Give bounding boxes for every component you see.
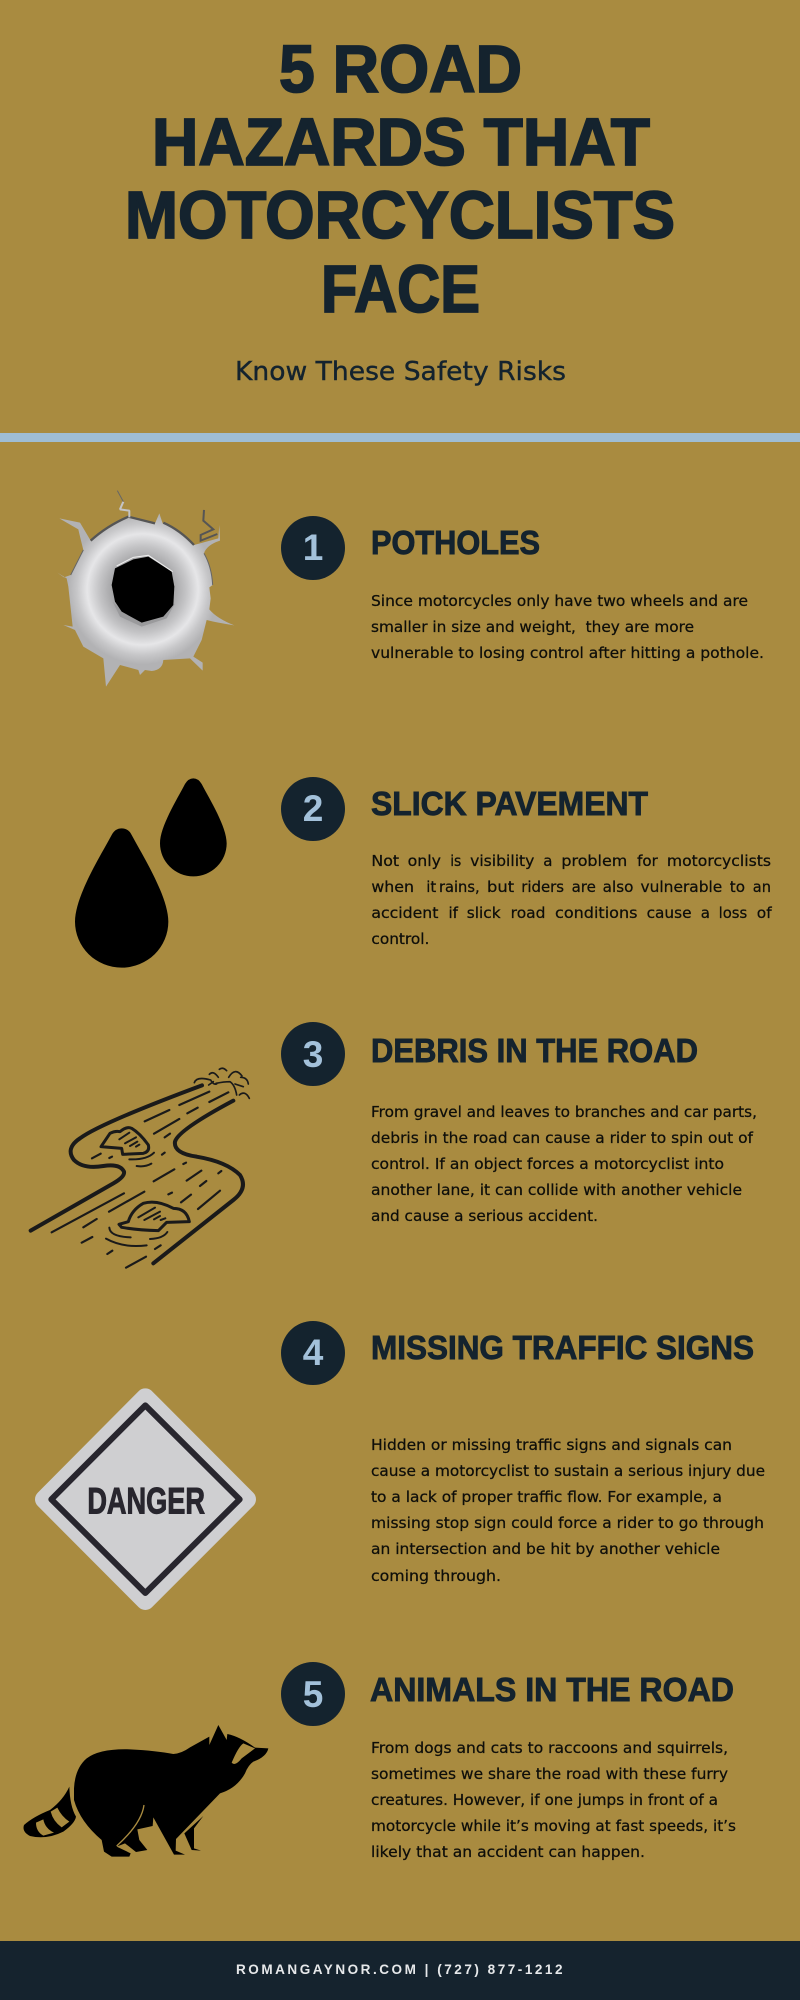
text block: slick pavement: to [730, 878, 745, 896]
title: FACE [321, 252, 480, 327]
text block: slick pavement: problem [561, 852, 627, 870]
text block: debris: and cause a serious accident. [371, 1207, 598, 1225]
panel: potholes [57, 491, 764, 687]
text block: animals: From dogs and cats to raccoons and squirrels, [371, 1739, 728, 1757]
text block: slick pavement: vulnerable [640, 878, 722, 896]
text block: missing signs: to a lack of proper traffic flow. For example, a [371, 1488, 722, 1506]
text block: slick pavement: for [637, 852, 659, 870]
text block: animals: creatures. However, if one jumps in front of a [371, 1791, 718, 1809]
text block: slick pavement: conditions [555, 904, 638, 922]
number badge 1 [281, 516, 345, 580]
number badge 2 [281, 777, 345, 841]
subtitle: Know These Safety Risks [235, 357, 566, 387]
icon: water drops [75, 778, 227, 968]
text block: potholes [371, 592, 764, 662]
text block: debris: debris in the road can cause a rider to spin out of [371, 1129, 754, 1147]
text block: slick pavement: a [543, 852, 552, 870]
text block: slick pavement: is [450, 852, 461, 870]
text block: slick pavement: Not [371, 852, 399, 870]
footer: ROMANGAYNOR.COM | (727) 877-1212 [236, 1961, 565, 1977]
text block: slick pavement: road [511, 904, 546, 922]
text block: slick pavement: rains, [439, 878, 480, 896]
text block: slick pavement: visibility [470, 852, 535, 870]
panel: animals in the road [23, 1662, 736, 1861]
icon: danger sign: DANGER [87, 1480, 205, 1521]
text block: slick pavement: cause [647, 904, 692, 922]
icon: danger sign [44, 1398, 247, 1601]
text block: slick pavement: riders [521, 878, 564, 896]
heading: animals in the road: ANIMALS IN THE ROAD [370, 1671, 734, 1708]
text block: slick pavement: of [757, 904, 772, 922]
number badge 1: 1 [303, 527, 323, 568]
panel: slick pavement [75, 777, 772, 968]
text block: potholes: smaller in size and weight, they are more [371, 618, 694, 636]
text block: slick pavement: but [487, 878, 514, 896]
text block: animals: sometimes we share the road with these furry [371, 1765, 728, 1783]
panel: debris in the road [31, 1022, 757, 1268]
number badge 4 [281, 1321, 345, 1385]
text block: missing signs: cause a motorcyclist to sustain a serious injury due [371, 1462, 765, 1480]
text block: missing signs [371, 1436, 765, 1585]
text block: animals: motorcycle while it’s moving at fast speeds, it’s [371, 1817, 736, 1835]
icon: winding road with debris [31, 1068, 249, 1268]
text block: debris: From gravel and leaves to branches and car parts, [371, 1103, 757, 1121]
heading: slick pavement: SLICK PAVEMENT [371, 785, 648, 822]
heading: missing traffic signs: MISSING TRAFFIC SIGNS [371, 1329, 754, 1366]
icon: pothole [57, 491, 234, 687]
text block: slick pavement: accident [371, 904, 439, 922]
text block: slick pavement: loss [719, 904, 747, 922]
text block: slick pavement: control. [371, 930, 429, 948]
text block: slick pavement [371, 852, 772, 948]
text block: slick pavement: are [572, 878, 596, 896]
text block: slick pavement: also [603, 878, 633, 896]
text block: missing signs: an intersection and be hit by another vehicle [371, 1540, 720, 1558]
number badge 5 [281, 1662, 345, 1726]
text block: missing signs: coming through. [371, 1567, 501, 1585]
heading: potholes: POTHOLES [371, 524, 540, 561]
title [125, 32, 675, 327]
panel: missing traffic signs [44, 1321, 765, 1601]
text block: debris: another lane, it can collide with another vehicle [371, 1181, 742, 1199]
title: 5 ROAD [279, 32, 522, 107]
text block: debris: control. If an object forces a motorcyclist into [371, 1155, 724, 1173]
number badge 4: 4 [303, 1332, 324, 1373]
title: MOTORCYCLISTS [125, 178, 675, 253]
number badge 2: 2 [303, 788, 323, 829]
text block: animals: likely that an accident can happen. [371, 1843, 645, 1861]
heading: debris in the road: DEBRIS IN THE ROAD [371, 1032, 698, 1069]
footer [0, 1941, 800, 2000]
text block: potholes: Since motorcycles only have two wheels and are [371, 592, 748, 610]
text block: animals [371, 1739, 736, 1861]
text block: potholes: vulnerable to losing control after hitting a pothole. [371, 644, 764, 662]
text block: slick pavement: slick [467, 904, 501, 922]
text block: slick pavement: it [426, 878, 436, 896]
text block: missing signs: Hidden or missing traffic signs and signals can [371, 1436, 732, 1454]
divider band [0, 433, 800, 442]
icon: raccoon [23, 1725, 268, 1857]
number badge 5: 5 [303, 1674, 323, 1715]
title: HAZARDS THAT [152, 105, 650, 180]
number badge 3 [281, 1022, 345, 1086]
text block: missing signs: missing stop sign could force a rider to go through [371, 1514, 764, 1532]
number badge 3: 3 [303, 1034, 323, 1075]
text block: debris [371, 1103, 757, 1225]
text block: slick pavement: if [448, 904, 459, 922]
text block: slick pavement: only [408, 852, 441, 870]
text block: slick pavement: when [371, 878, 414, 896]
text block: slick pavement: an [753, 878, 771, 896]
text block: slick pavement: a [701, 904, 710, 922]
text block: slick pavement: motorcyclists [667, 852, 771, 870]
